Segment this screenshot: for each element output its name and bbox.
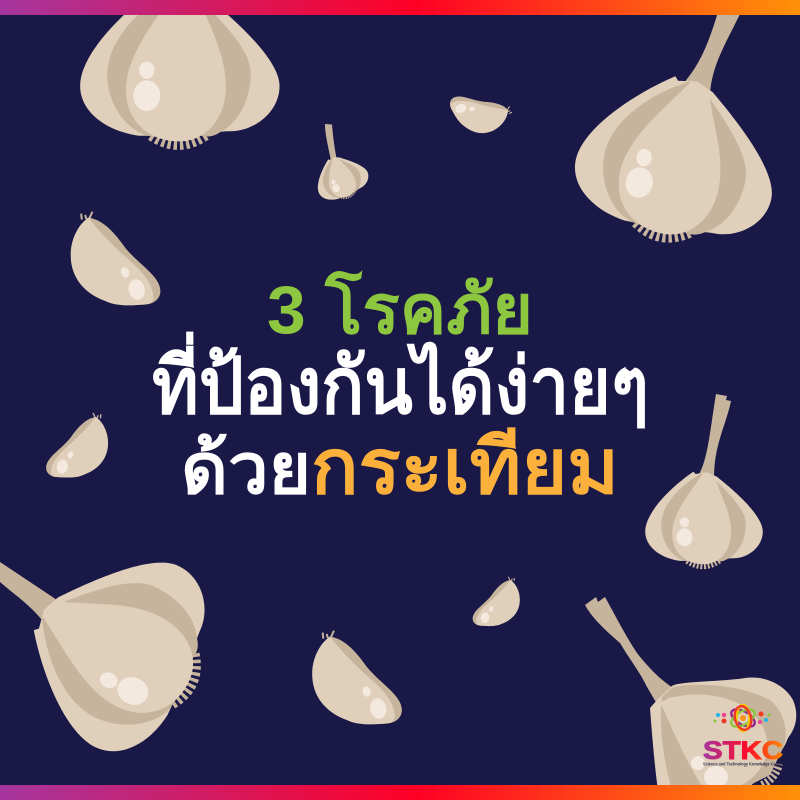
garlic clove lower left bbox=[46, 413, 108, 478]
garlic clove top centre bbox=[447, 75, 516, 144]
top gradient bar bbox=[0, 0, 800, 15]
garlic bulb middle right bbox=[645, 394, 763, 566]
title line 2: ที่ป้องกันได้ง่ายๆ bbox=[152, 331, 649, 430]
title line 1: 3 โรคภัย bbox=[267, 270, 533, 348]
garlic bulb bottom left bbox=[0, 523, 234, 773]
logo: STKC bbox=[703, 704, 783, 766]
title line 3 highlighted word: กระเทียม bbox=[311, 425, 619, 510]
garlic bulb bottom right bbox=[585, 597, 796, 790]
logo wordmark: STKC bbox=[703, 737, 783, 765]
small garlic bulb top centre bbox=[308, 124, 374, 207]
logo atom icon bbox=[714, 704, 770, 732]
garlic bulb top right bbox=[564, 12, 791, 256]
garlic bulb top left bbox=[80, 0, 280, 145]
title bbox=[152, 270, 649, 510]
garlic clove upper left bbox=[71, 212, 160, 305]
logo tagline: Science and Technology Knowledge Center bbox=[703, 762, 783, 766]
garlic clove bottom centre right bbox=[473, 577, 520, 626]
bottom gradient bar bbox=[0, 785, 800, 800]
garlic clove bottom centre bbox=[312, 631, 402, 724]
title line 3 white part: ด้วย bbox=[181, 430, 311, 508]
